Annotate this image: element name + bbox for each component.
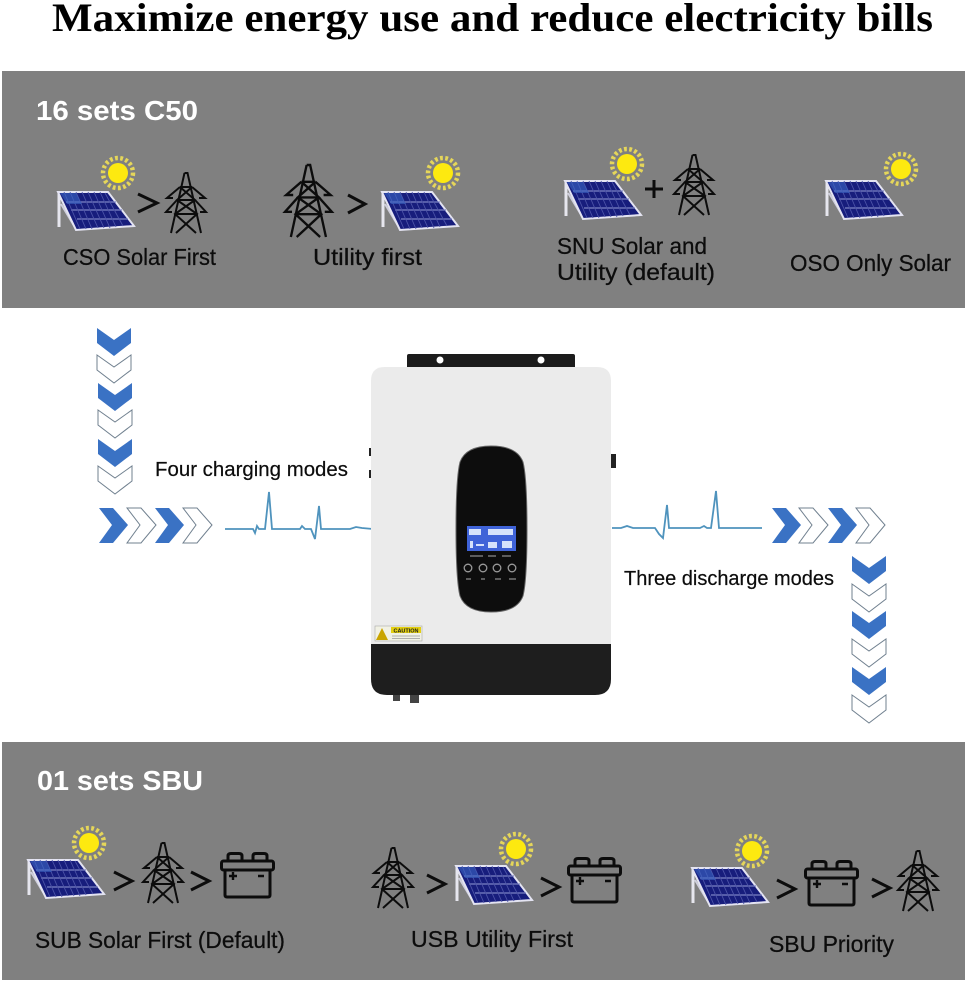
mode: USB Utility First [373, 834, 620, 952]
connectors [393, 695, 419, 703]
heading: 01 sets SBU: 01 sets SBU [37, 765, 203, 796]
mode: Utility first [285, 158, 458, 270]
caution label [375, 626, 422, 641]
mode: SBU Priority: SBU Priority [769, 931, 894, 957]
mode: USB Utility First: USB Utility First [411, 926, 574, 952]
case body [371, 367, 611, 644]
heading: 16 sets C50: 16 sets C50 [36, 95, 198, 126]
arrow: left vertical chevrons [97, 328, 132, 494]
lcd screen [467, 526, 516, 551]
label: four charging modes: Four charging modes [155, 458, 348, 481]
control pod [456, 446, 527, 612]
label: three discharge modes: Three discharge modes [624, 567, 834, 590]
waveform: right [612, 491, 762, 538]
waveform: left [225, 492, 373, 539]
mode: Utility first: Utility first [313, 244, 423, 270]
inverter [369, 354, 616, 703]
lower case [371, 644, 611, 695]
mode: SNU Solar and Utility [557, 149, 715, 285]
caution label: CAUTION [393, 628, 419, 634]
arrow: right vertical chevrons [852, 556, 886, 723]
panel: charging modes [2, 71, 965, 308]
panel: discharge modes [2, 742, 965, 980]
mode: CSO Solar First: CSO Solar First [63, 244, 217, 270]
arrow: left horizontal chevrons [99, 508, 212, 543]
mode: OSO Only Solar: OSO Only Solar [790, 250, 951, 276]
mode: SUB Solar First [28, 828, 285, 953]
arrow: right horizontal chevrons [772, 508, 885, 543]
mode: OSO Only Solar [790, 154, 951, 276]
mode: SNU Solar and Utility: SNU Solar and [557, 233, 707, 259]
mode: SNU Solar and Utility: Utility (default) [557, 259, 715, 285]
control buttons [464, 564, 516, 572]
mounting bracket [407, 354, 575, 367]
mode: SBU Priority [692, 836, 938, 957]
mode: CSO Solar First [58, 158, 217, 270]
mode: SUB Solar First: SUB Solar First (Default) [35, 927, 285, 953]
